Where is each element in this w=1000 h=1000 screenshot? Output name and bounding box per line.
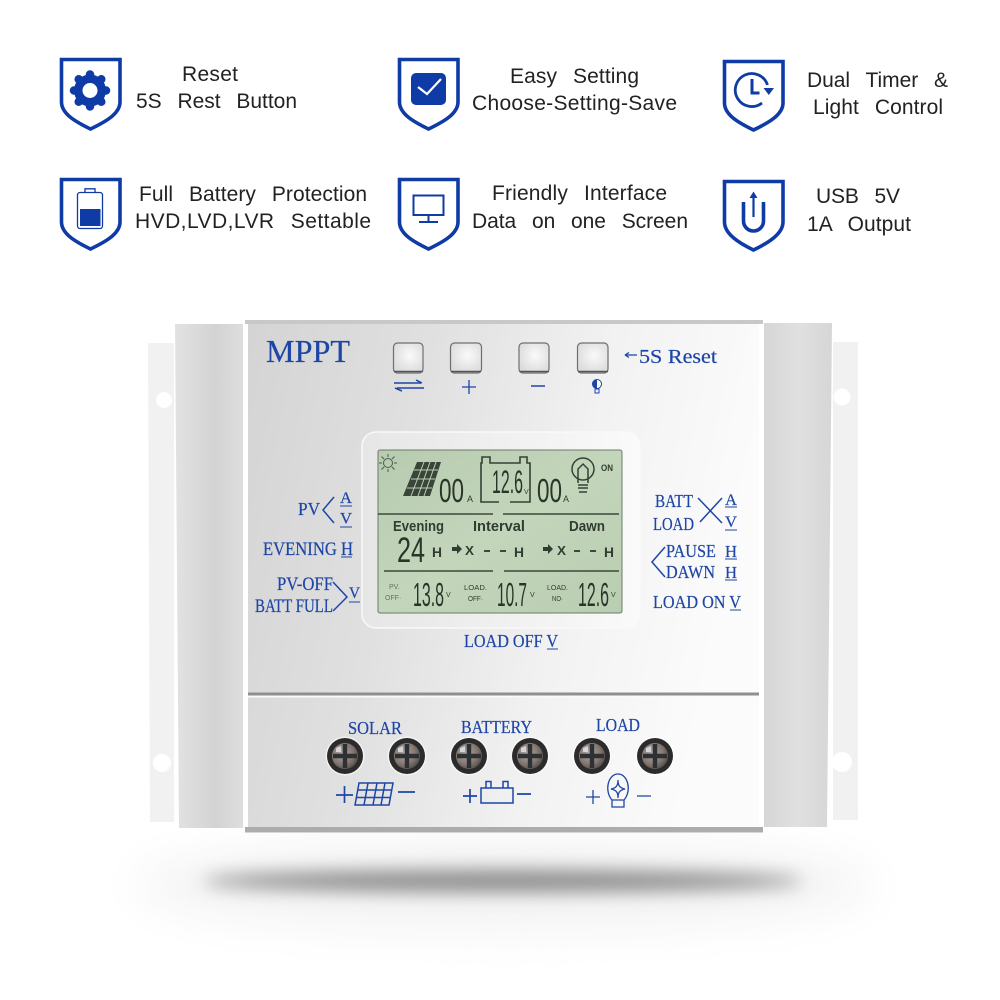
LCD: bulb icon bbox=[572, 458, 613, 492]
label: PV-off battery full bbox=[255, 575, 360, 617]
label: batt load A V: BATT bbox=[655, 491, 693, 511]
right display labels bbox=[652, 491, 741, 612]
LCD: load off voltage bbox=[464, 576, 535, 613]
label: PV-off battery full: BATT FULL bbox=[255, 597, 333, 617]
LCD: bulb icon: ON bbox=[601, 463, 613, 473]
feature text: easy setting: Choose-Setting-Save bbox=[472, 92, 677, 115]
LCD: sun icon bbox=[379, 454, 397, 472]
LCD: load off voltage: LOAD. bbox=[464, 583, 487, 592]
icon: check shield bbox=[400, 60, 458, 129]
LCD: solar panel icon bbox=[403, 462, 441, 496]
label: batt load A V: LOAD bbox=[653, 514, 694, 534]
LCD: schedule values: 24 bbox=[397, 531, 425, 570]
LCD: schedule values: H bbox=[514, 544, 524, 560]
terminal: battery bbox=[450, 717, 550, 803]
label: pause dawn: H bbox=[725, 542, 737, 561]
LCD: load on voltage: V bbox=[611, 592, 616, 599]
main panel bbox=[245, 320, 763, 833]
LCD: schedule values: H bbox=[604, 544, 614, 560]
label: load on: LOAD ON V bbox=[653, 592, 741, 612]
label: batt load A V: V bbox=[725, 514, 737, 531]
label: pause dawn: PAUSE bbox=[666, 541, 716, 561]
LCD: schedule headers: Dawn bbox=[569, 518, 605, 535]
LCD: PV current: 00 bbox=[439, 472, 464, 509]
LCD: PV off voltage: V bbox=[446, 592, 451, 599]
feature text: dual timer: Light Control bbox=[813, 96, 943, 119]
LCD: schedule values: X bbox=[557, 543, 566, 558]
LCD: battery voltage: V bbox=[524, 489, 529, 496]
display bezel bbox=[362, 432, 640, 628]
LCD: schedule values: X bbox=[465, 543, 474, 558]
label: pause dawn: DAWN bbox=[666, 562, 715, 582]
label: PV A V: V bbox=[340, 510, 352, 528]
label: PV-off battery full: PV-OFF bbox=[277, 575, 333, 595]
terminal: solar: SOLAR bbox=[348, 718, 402, 738]
label: evening: EVENING H bbox=[263, 539, 353, 560]
label: pause dawn: H bbox=[725, 563, 737, 582]
load polarity symbols bbox=[586, 774, 651, 807]
feature text: usb output bbox=[807, 185, 911, 236]
label: PV A V: A bbox=[340, 490, 352, 507]
buttons row bbox=[394, 343, 608, 394]
LCD: battery voltage bbox=[481, 457, 530, 502]
feature text: usb output: USB 5V bbox=[816, 185, 900, 208]
feature: easy setting bbox=[400, 60, 677, 129]
feature text: battery protection: HVD,LVD,LVR Settable bbox=[135, 210, 371, 233]
right side wing bbox=[764, 323, 832, 827]
brand label: MPPT bbox=[266, 333, 350, 369]
label: PV-off battery full: V bbox=[349, 585, 360, 602]
LCD: schedule headers: Interval bbox=[473, 518, 525, 535]
feature: usb output bbox=[724, 182, 911, 250]
LCD: section dividers bbox=[378, 514, 619, 571]
LCD: PV current: A bbox=[467, 494, 473, 504]
LCD: load on voltage: NO· bbox=[552, 594, 563, 603]
feature text: dual timer: Dual Timer & bbox=[807, 69, 948, 92]
icon: gear shield bbox=[62, 60, 120, 129]
feature text: reset: 5S Rest Button bbox=[136, 90, 297, 113]
LCD: schedule values bbox=[397, 531, 614, 570]
label: load off: LOAD OFF V bbox=[464, 631, 558, 651]
LCD: PV off voltage: 13.8 bbox=[413, 576, 444, 613]
solar polarity symbols bbox=[336, 783, 415, 805]
LCD: load current: 00 bbox=[537, 472, 562, 509]
LCD: schedule headers: Evening bbox=[393, 518, 444, 535]
left mounting flange bbox=[148, 343, 174, 822]
label: PV A V: PV bbox=[298, 499, 320, 519]
LCD: load current: A bbox=[563, 494, 569, 504]
LCD: schedule values: H bbox=[432, 544, 442, 560]
feature text: reset: Reset bbox=[182, 63, 238, 86]
feature: reset bbox=[62, 60, 297, 129]
feature: battery protection bbox=[62, 180, 371, 249]
button: mode bbox=[394, 343, 424, 391]
terminal: load: LOAD bbox=[596, 715, 640, 735]
battery polarity symbols bbox=[463, 782, 531, 803]
LCD: PV off voltage bbox=[385, 576, 451, 613]
device: solar charge controller bbox=[148, 320, 858, 833]
LCD: load off voltage: OFF· bbox=[468, 594, 483, 603]
terminal: battery: BATTERY bbox=[461, 717, 532, 737]
feature text: usb output: 1A Output bbox=[807, 213, 911, 236]
LCD screen bbox=[378, 450, 622, 613]
label: pause dawn bbox=[652, 541, 737, 582]
icon: clock shield bbox=[724, 62, 783, 130]
LCD: PV off voltage: OFF· bbox=[385, 595, 401, 602]
LCD: load on voltage bbox=[547, 576, 616, 613]
LCD: load off voltage: V bbox=[530, 592, 535, 599]
feature: friendly interface bbox=[400, 180, 688, 249]
LCD: load on voltage: LOAD. bbox=[547, 583, 568, 592]
reset label: 5S Reset bbox=[639, 346, 717, 368]
feature: dual timer bbox=[724, 62, 948, 130]
button: minus bbox=[519, 343, 549, 386]
LCD: load on voltage: 12.6 bbox=[578, 576, 609, 613]
feature text: battery protection bbox=[135, 183, 371, 233]
floor shadow bbox=[135, 840, 875, 930]
button: light bbox=[578, 343, 608, 393]
feature text: easy setting bbox=[472, 65, 677, 115]
feature text: friendly interface bbox=[472, 182, 688, 233]
feature text: easy setting: Easy Setting bbox=[510, 65, 639, 88]
LCD: schedule headers bbox=[393, 518, 605, 535]
label: PV A V bbox=[298, 490, 352, 528]
icon: monitor shield bbox=[400, 180, 458, 249]
feature text: reset bbox=[136, 63, 297, 113]
left side wing bbox=[175, 324, 243, 828]
icon: usb shield bbox=[724, 182, 783, 250]
button: plus bbox=[450, 343, 482, 394]
LCD: load off voltage: 10.7 bbox=[497, 576, 527, 613]
terminal: solar bbox=[326, 718, 426, 805]
icon: battery shield bbox=[62, 180, 120, 249]
terminal: load bbox=[572, 715, 674, 807]
label: batt load A V: A bbox=[725, 492, 737, 509]
right mounting flange bbox=[832, 342, 858, 820]
feature text: friendly interface: Data on one Screen bbox=[472, 210, 688, 233]
LCD: PV off voltage: PV. bbox=[389, 584, 400, 591]
left display labels bbox=[255, 490, 360, 617]
feature text: dual timer bbox=[807, 69, 948, 119]
LCD: battery voltage: 12.6 bbox=[492, 464, 523, 500]
feature text: friendly interface: Friendly Interface bbox=[492, 182, 667, 205]
label: batt load A V bbox=[653, 491, 737, 534]
feature text: battery protection: Full Battery Protection bbox=[139, 183, 367, 206]
